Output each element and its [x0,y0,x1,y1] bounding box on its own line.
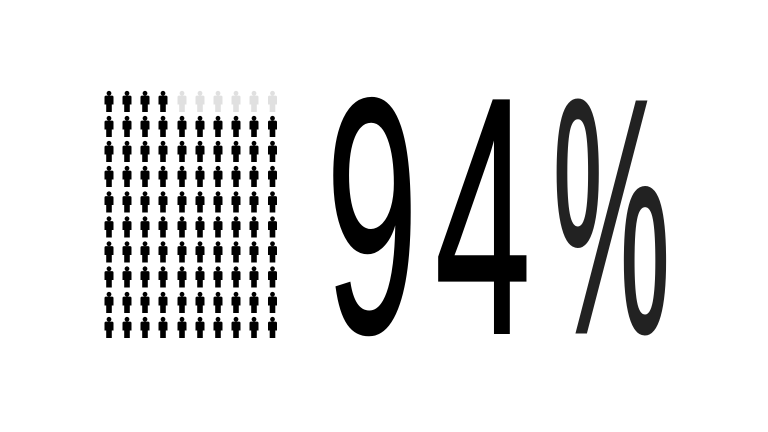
percent sign: % [552,30,670,403]
big number: 4: 4 [435,28,531,404]
row 7 [104,241,277,262]
pictogram grid: 94 of 100 people [104,91,277,338]
row 10 [104,317,277,338]
row 3 [104,141,277,162]
big number: 9: 9 [326,30,418,404]
row 6 [104,216,277,238]
row 1: 4 black and 6 grey people [104,91,277,112]
row 9 [104,292,277,313]
row 5 [104,191,277,212]
row 2 [104,116,277,137]
row 8 [104,266,277,288]
row 4 [104,166,277,187]
